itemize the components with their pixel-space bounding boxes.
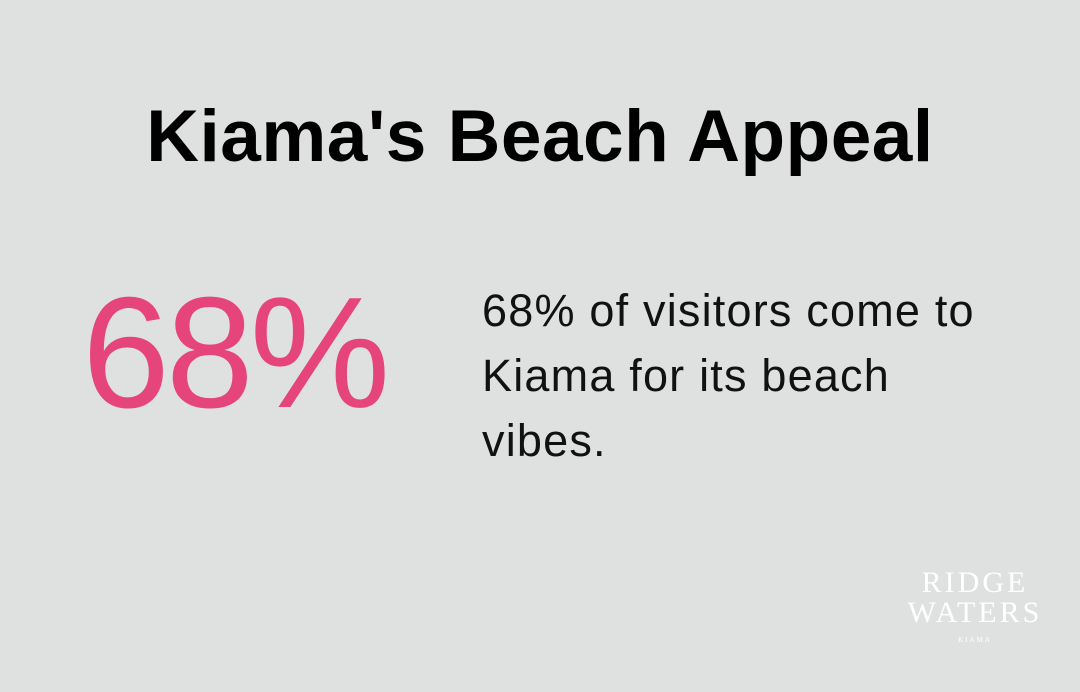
description text: 68% of visitors come to <box>482 285 975 336</box>
big stat: 68% <box>82 265 386 441</box>
description text <box>482 285 975 466</box>
description text: Kiama for its beach <box>482 350 890 401</box>
logo: RIDGE <box>922 566 1028 599</box>
description text: vibes. <box>482 415 607 466</box>
logo: WATERS <box>908 596 1042 629</box>
title: Kiama's Beach Appeal <box>146 96 934 177</box>
logo: KIAMA <box>958 636 992 644</box>
logo <box>908 566 1042 644</box>
